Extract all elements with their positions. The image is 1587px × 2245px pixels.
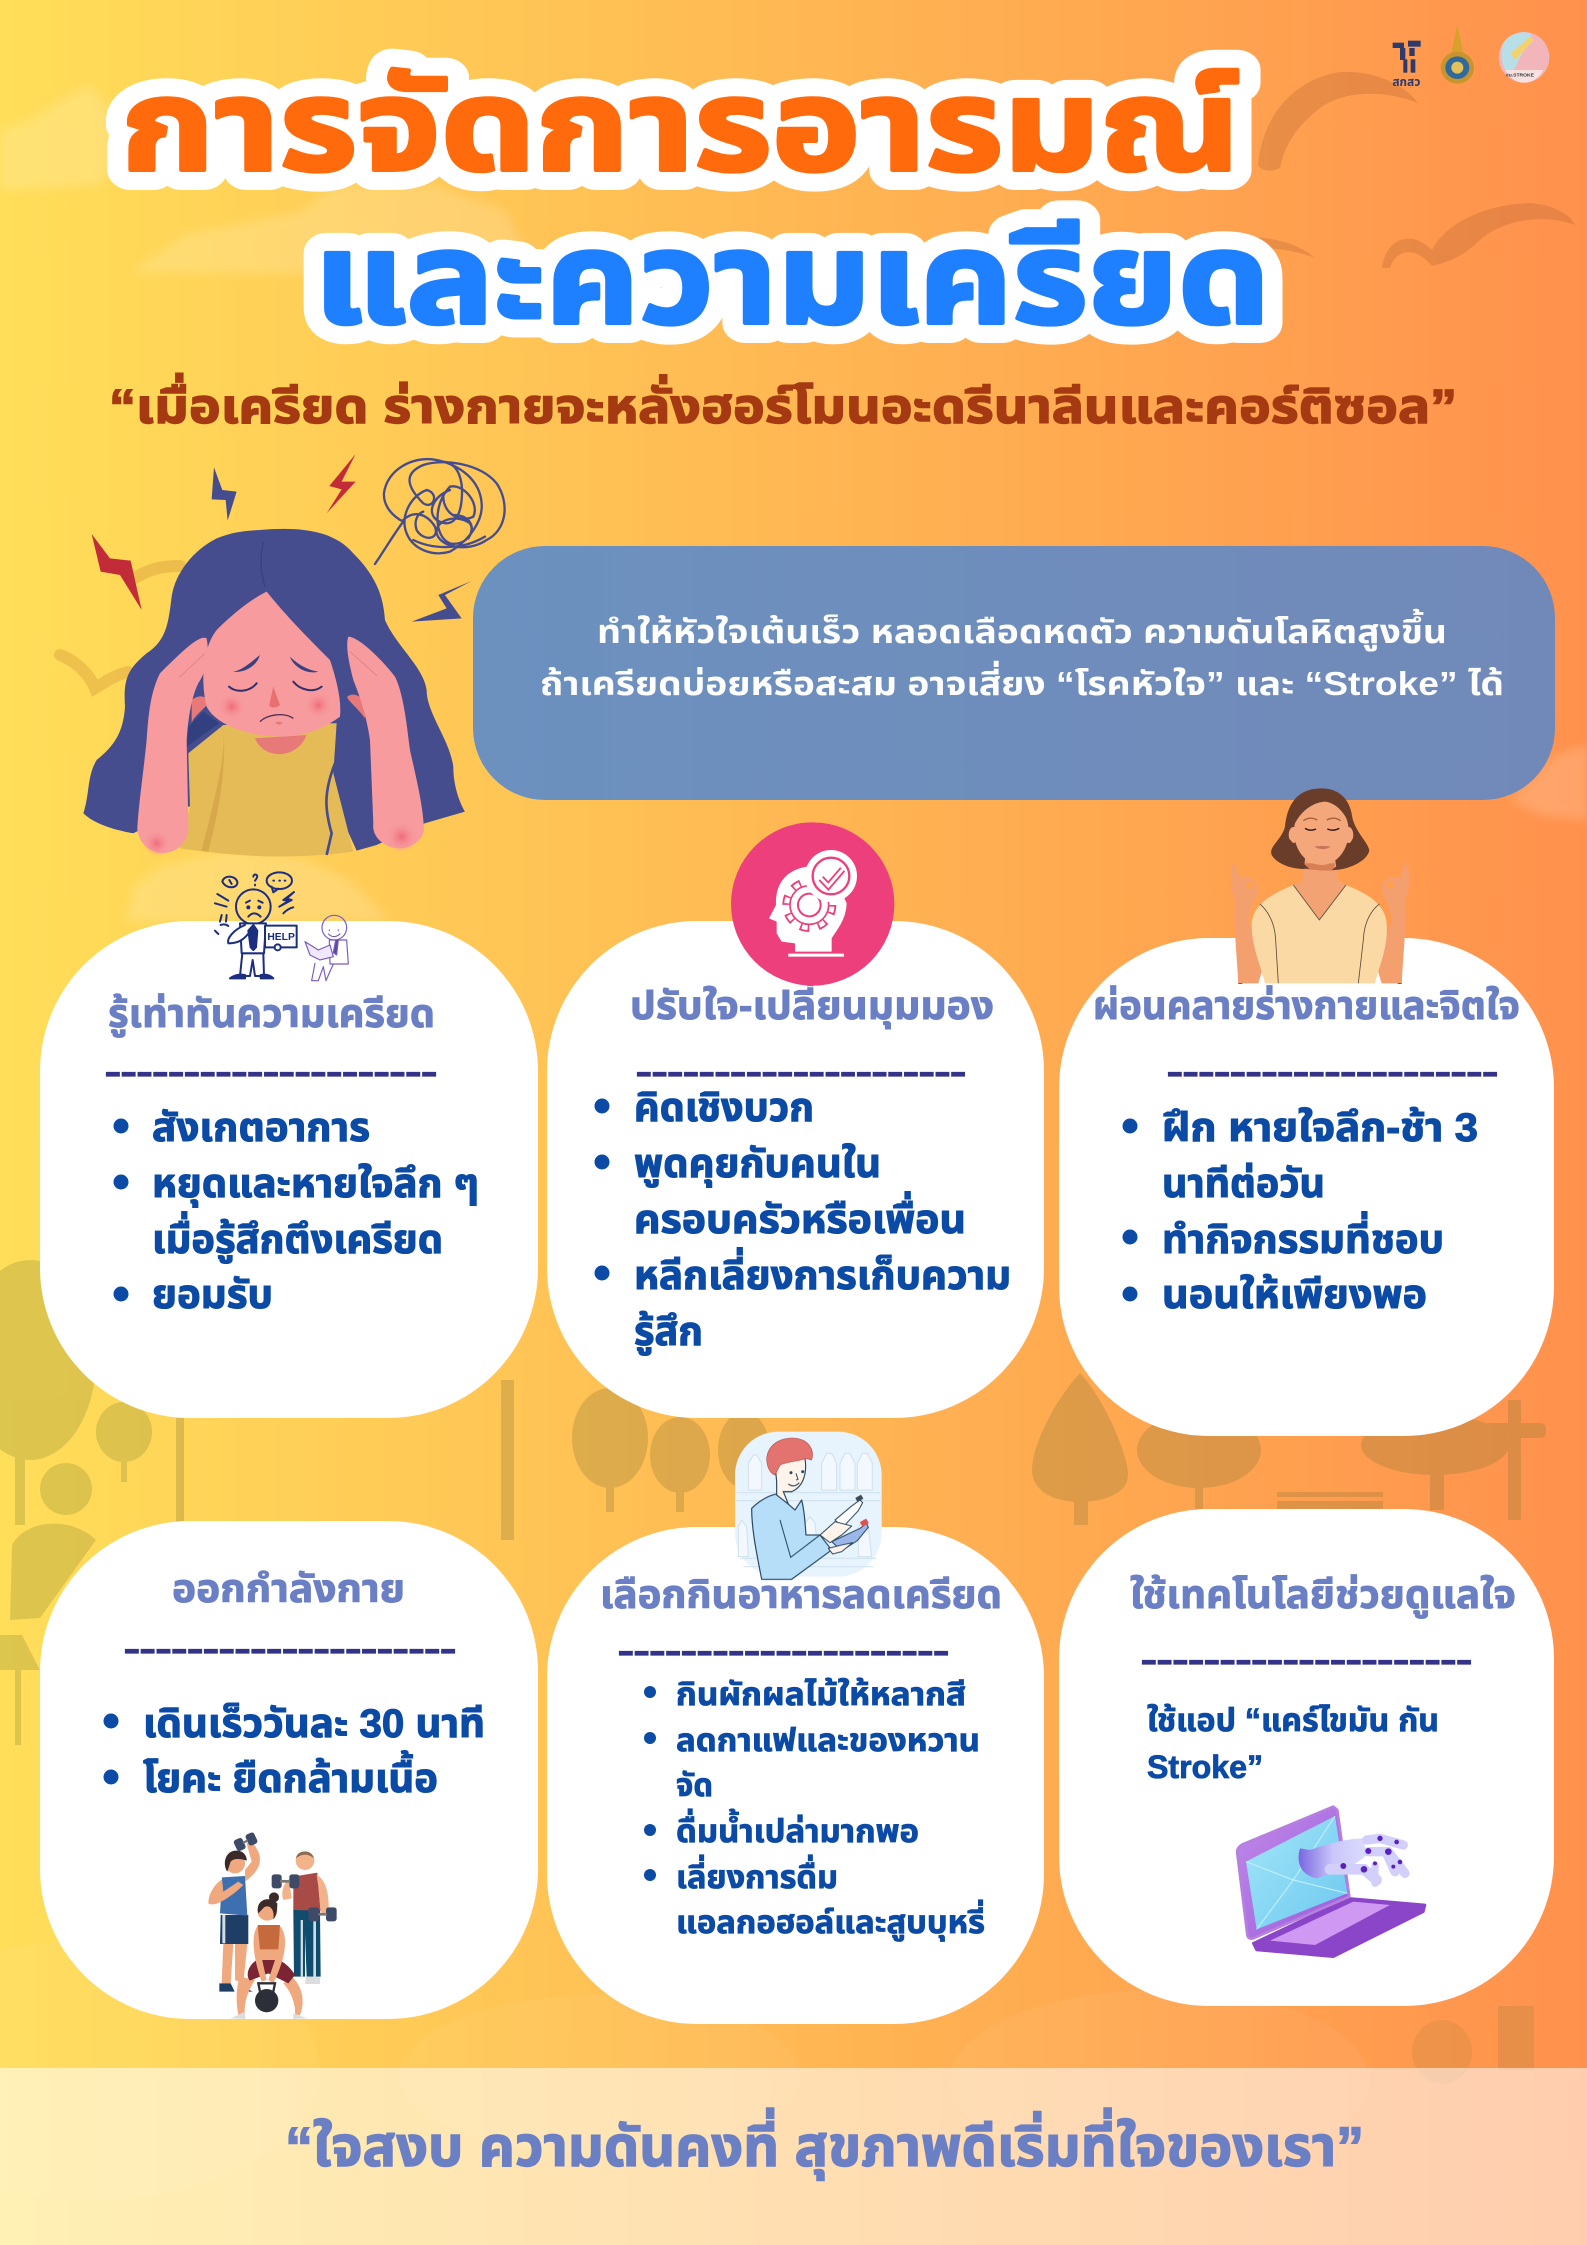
logo: tsri: สกสว (1392, 75, 1420, 89)
list: ลดกาแฟและของหวาน (676, 1722, 980, 1758)
title line 1: การจัดการอารมณ์ (121, 55, 1240, 198)
box text line 1: ทำให้หัวใจเต้นเร็ว หลอดเลือดหดตัว ความดันโลหิตสูงขึ้น (597, 608, 1447, 652)
list: ครอบครัวหรือเพื่อน (634, 1191, 966, 1242)
list: ฝึก หายใจลึก-ช้า 3 (1162, 1105, 1478, 1150)
subtitle: “เมื่อเครียด ร่างกายจะหลั่งฮอร์โมนอะดรีนาลีนและคอร์ติซอล” (109, 373, 1457, 434)
icon: laptop with robot hand (1237, 1807, 1425, 1957)
panel: adjust mindset (547, 921, 1044, 1418)
icon: meditating woman (1231, 788, 1409, 984)
list (594, 1086, 1011, 1356)
list: เมื่อรู้สึกตึงเครียด (152, 1211, 443, 1264)
box text line 2: ถ้าเครียดบ่อยหรือสะสม อาจเสี่ยง “โรคหัวใจ” และ “Stroke” ได้ (540, 660, 1504, 702)
list: ยอมรับ (152, 1273, 273, 1317)
dashed divider: --------------------- (636, 1056, 966, 1089)
list: รู้สึก (634, 1309, 703, 1356)
park trees (0, 1260, 1546, 2200)
panel: technology (1059, 1509, 1554, 2006)
list (104, 1702, 485, 1801)
icon: head with gear and check (731, 822, 894, 986)
list: ดื่มน้ำเปล่ามากพอ (676, 1808, 919, 1849)
logos (1392, 24, 1549, 89)
panel: relax body and mind (1059, 938, 1554, 1436)
logo: stroke campaign: #u.STROKE (1506, 73, 1535, 79)
heading: ออกกำลังกาย (172, 1568, 405, 1611)
list: พูดคุยกับคนใน (634, 1142, 881, 1188)
dashed divider: --------------------- (618, 1635, 949, 1668)
icon: people exercising (208, 1832, 337, 2019)
icon: stressed man asking for help (215, 872, 348, 981)
icon: man reading bottle labels (735, 1432, 882, 1579)
panel: blue explanation box (473, 546, 1555, 800)
logo: stroke campaign (1499, 32, 1549, 83)
list: จัด (676, 1767, 713, 1803)
list: นอนให้เพียงพอ (1162, 1272, 1427, 1317)
list (644, 1676, 985, 1941)
closing quote: “ใจสงบ ความดันคงที่ สุขภาพดีเริ่มที่ใจของเรา” (285, 2107, 1364, 2181)
footer band (0, 2068, 1587, 2245)
body text: ใช้แอป “แคร์ไขมัน กัน (1147, 1702, 1439, 1738)
heading: รู้เท่าทันความเครียด (108, 993, 435, 1037)
list: ทำกิจกรรมที่ชอบ (1162, 1211, 1444, 1262)
dashed divider: --------------------- (105, 1056, 437, 1089)
icon: stressed man asking for help: HELP (267, 932, 295, 943)
list: โยคะ ยืดกล้ามเนื้อ (143, 1750, 438, 1801)
heading: เลือกกินอาหารลดเครียด (600, 1574, 1002, 1617)
panel: food choices (547, 1527, 1044, 2024)
list: เดินเร็ววันละ 30 นาที (143, 1702, 485, 1746)
list: สังเกตอาการ (152, 1106, 370, 1150)
list: คิดเชิงบวก (634, 1086, 814, 1130)
list: แอลกอฮอล์และสูบบุหรี่ (676, 1899, 985, 1941)
title (121, 55, 1270, 351)
list: นาทีต่อวัน (1162, 1161, 1325, 1206)
list: หลีกเลี่ยงการเก็บความ (634, 1247, 1011, 1298)
logo: crest (1441, 24, 1474, 84)
panel: stress awareness (40, 921, 538, 1418)
heading: ผ่อนคลายร่างกายและจิตใจ (1093, 985, 1520, 1028)
icon: stressed woman (83, 454, 505, 857)
body text: Stroke” (1147, 1749, 1263, 1785)
dashed divider: --------------------- (1167, 1056, 1498, 1089)
list (1122, 1105, 1478, 1317)
title line 2: และความเครียด (314, 208, 1270, 351)
title line 1: การจัดการอารมณ์ (121, 55, 1240, 198)
heading: ใช้เทคโนโลยีช่วยดูแลใจ (1130, 1574, 1516, 1618)
panel: exercise (40, 1521, 538, 2019)
dashed divider: --------------------- (1141, 1644, 1472, 1677)
list: หยุดและหายใจลึก ๆ (152, 1162, 479, 1208)
body text (1147, 1702, 1439, 1785)
list (114, 1106, 479, 1317)
heading: ปรับใจ-เปลี่ยนมุมมอง (630, 978, 994, 1029)
list: เลี่ยงการดื่ม (676, 1854, 838, 1895)
list: กินผักผลไม้ให้หลากสี (676, 1676, 966, 1712)
title line 2: และความเครียด (314, 208, 1270, 351)
logo: tsri (1392, 41, 1421, 89)
dashed divider: --------------------- (124, 1633, 456, 1666)
